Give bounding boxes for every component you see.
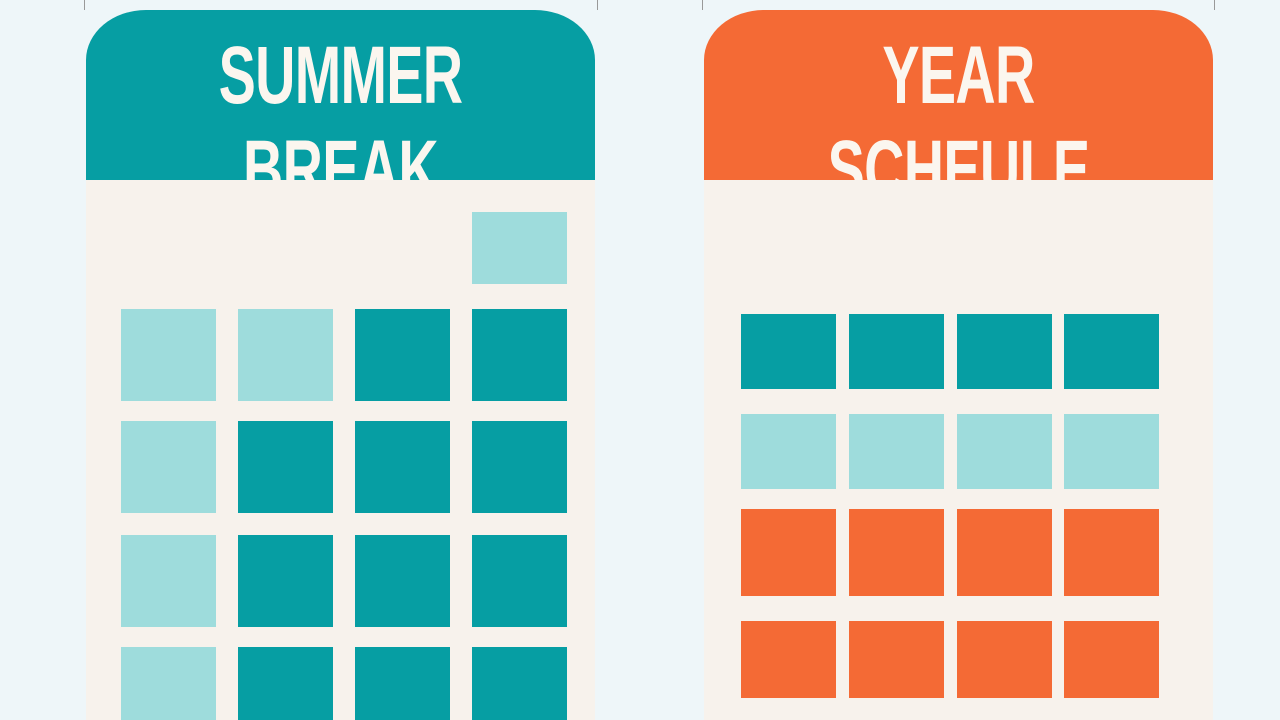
grid: year schedule squares <box>741 314 1159 698</box>
panel: year schedule <box>704 10 1213 720</box>
panel: summer break <box>86 10 595 720</box>
heading: year scheule: YEAR <box>882 30 1035 121</box>
heading: summer break: SUMMER <box>219 30 462 121</box>
heading: summer break <box>86 10 595 180</box>
grid: summer break squares <box>121 212 567 720</box>
heading: year scheule <box>704 10 1213 180</box>
